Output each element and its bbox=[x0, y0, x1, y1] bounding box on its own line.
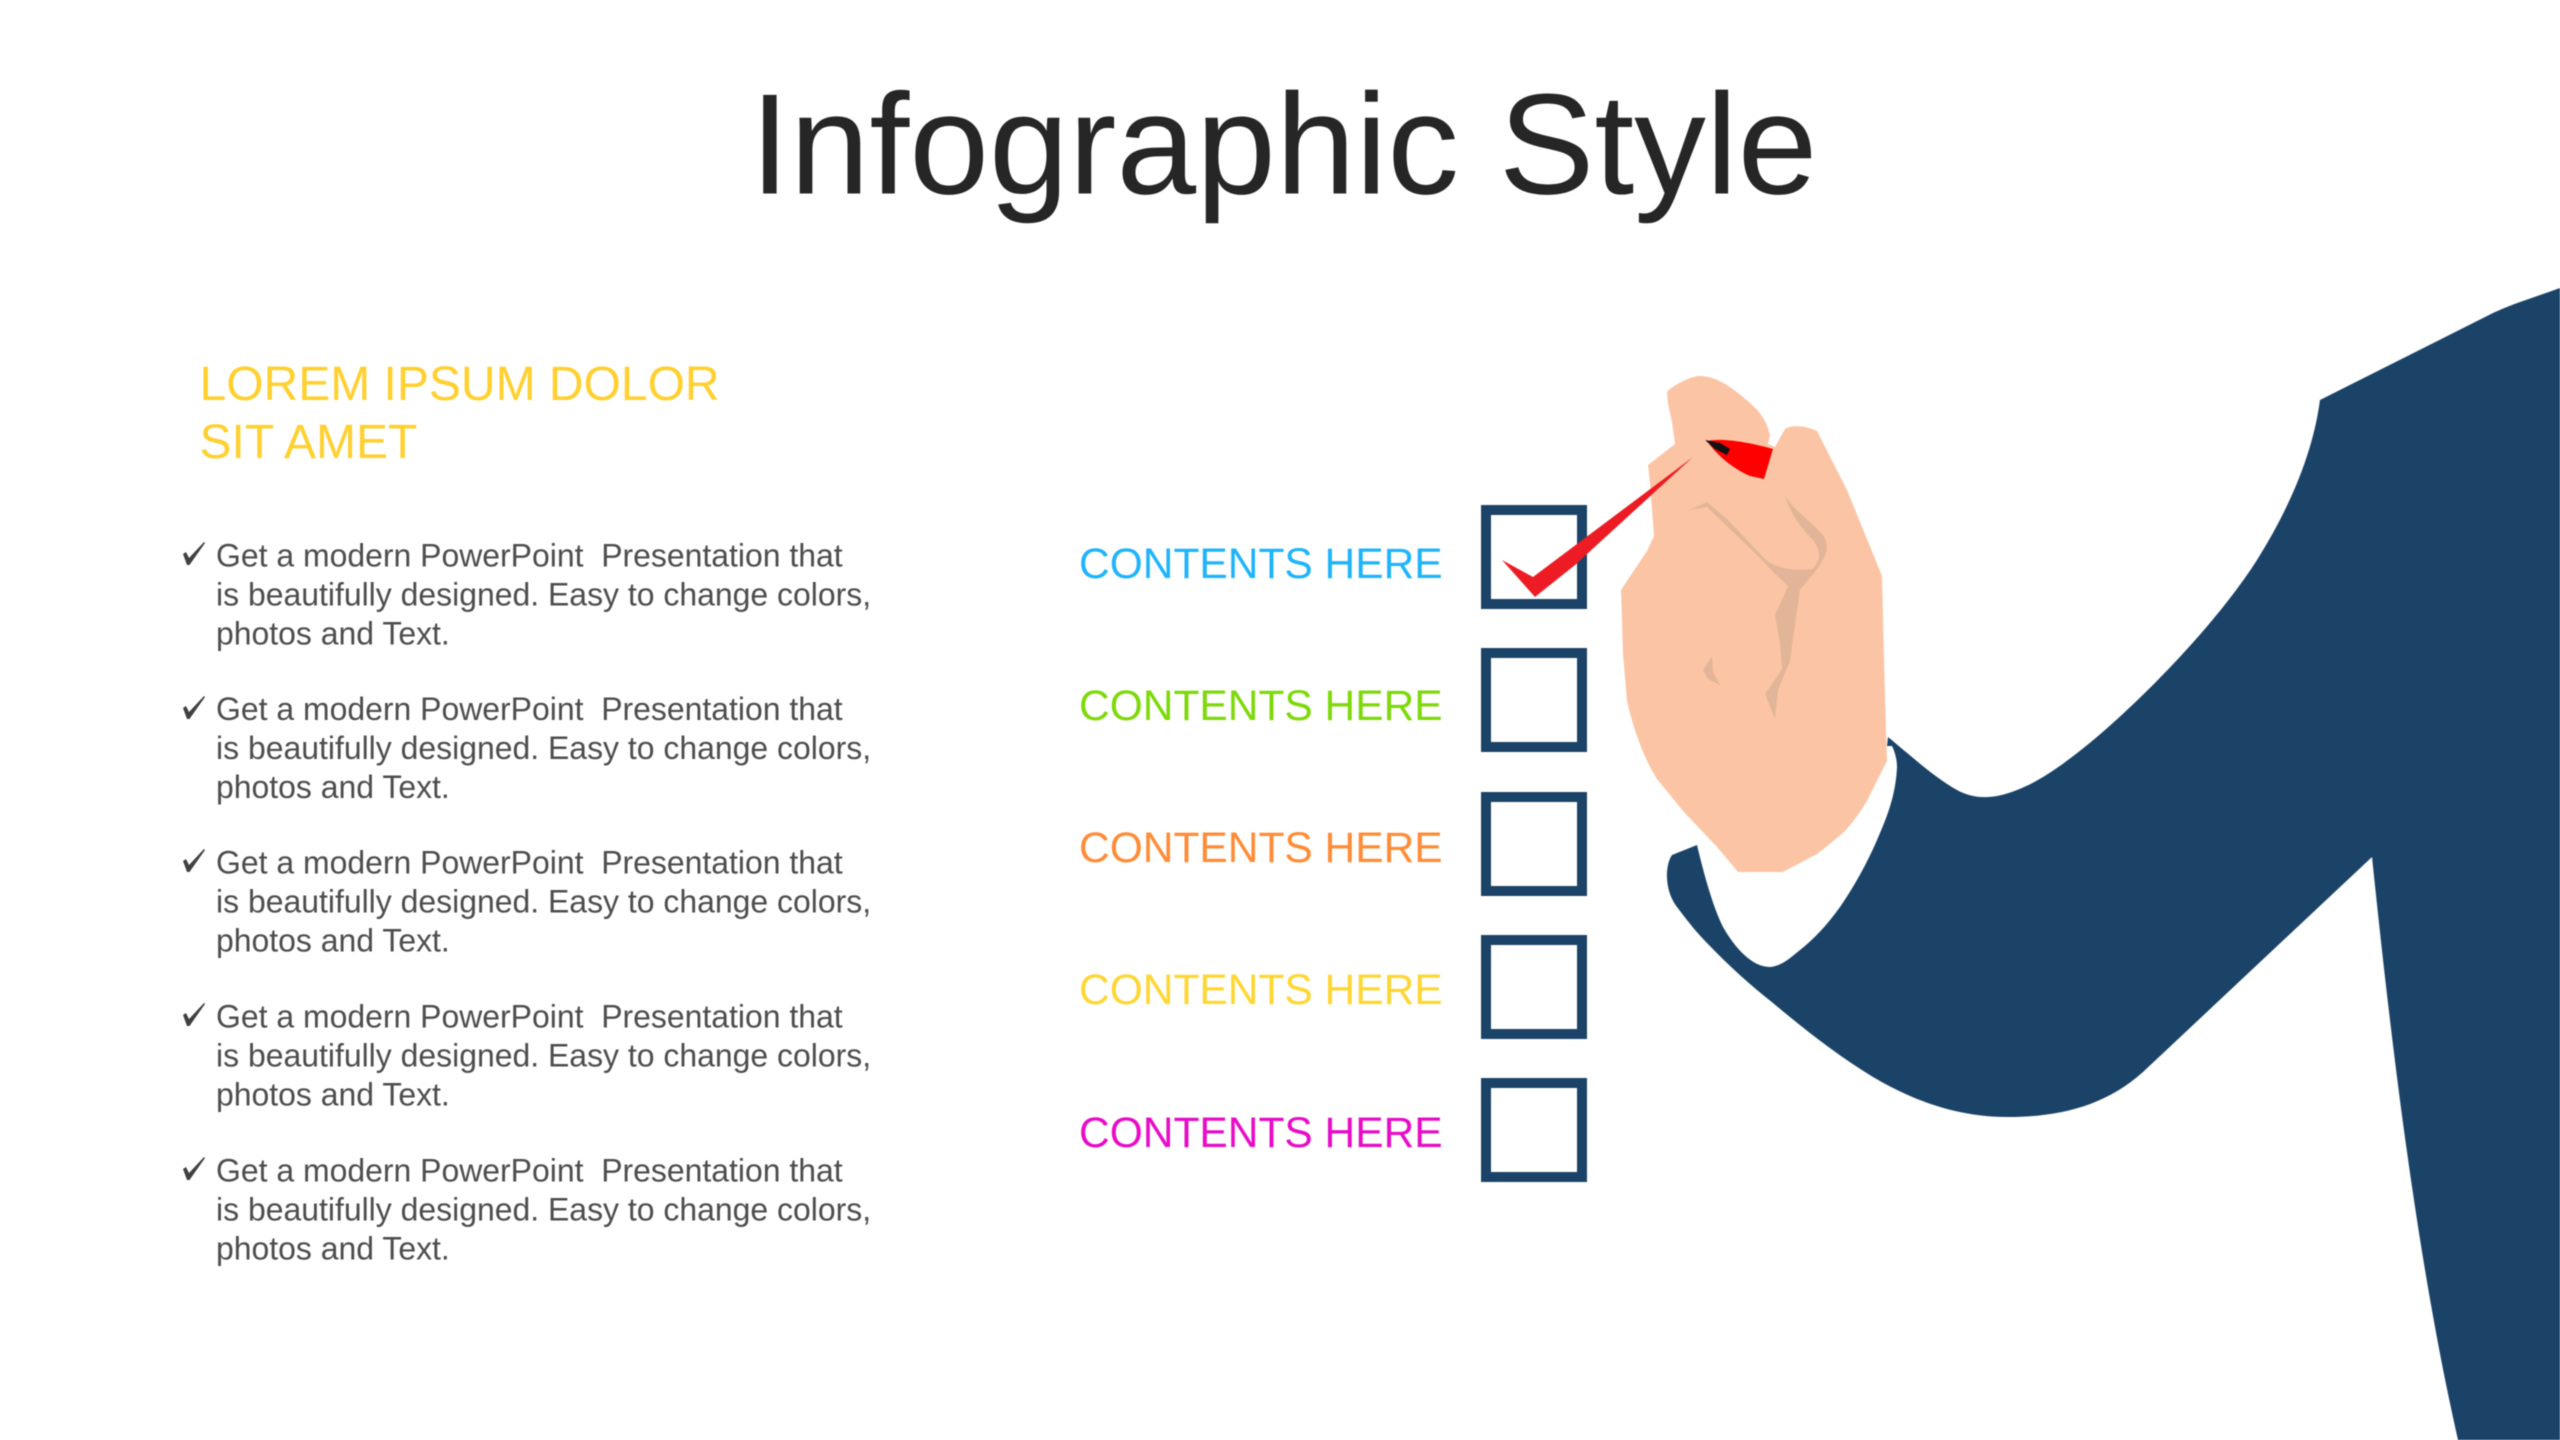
bullet item 5: is beautifully designed. Easy to change colors, bbox=[216, 1192, 871, 1228]
bullet item 2: is beautifully designed. Easy to change colors, bbox=[216, 730, 871, 766]
bullet item 3: Get a modern PowerPoint Presentation that bbox=[216, 844, 843, 880]
bullet item 4: Get a modern PowerPoint Presentation that bbox=[216, 998, 843, 1034]
bullet item 5: Get a modern PowerPoint Presentation that bbox=[216, 1152, 843, 1188]
bullet item 4: is beautifully designed. Easy to change colors, bbox=[216, 1038, 871, 1074]
red tick mark bbox=[1502, 457, 1693, 597]
checklist labels: CONTENTS HERE bbox=[1079, 1110, 1443, 1157]
bullet list bbox=[183, 538, 871, 1266]
bullet item 1: is beautifully designed. Easy to change colors, bbox=[216, 576, 871, 612]
bullet item 2: Get a modern PowerPoint Presentation that bbox=[216, 691, 843, 727]
checkboxes bbox=[1486, 510, 1582, 1177]
suit sleeve bbox=[1667, 288, 2560, 1440]
bullet item 5: photos and Text. bbox=[216, 1230, 450, 1266]
checklist labels: CONTENTS HERE bbox=[1079, 967, 1443, 1014]
bullet item 5 bbox=[183, 1152, 871, 1266]
bullet item 4 bbox=[183, 998, 871, 1112]
bullet item 4: photos and Text. bbox=[216, 1076, 450, 1112]
hand shape bbox=[1621, 376, 1887, 872]
pen bbox=[1705, 440, 1773, 479]
title: Infographic Style bbox=[750, 64, 1817, 224]
hand bbox=[1621, 376, 1887, 872]
heading bbox=[200, 358, 720, 469]
hand creases bbox=[1685, 495, 1827, 719]
checklist labels: CONTENTS HERE bbox=[1079, 683, 1443, 730]
checklist labels: CONTENTS HERE bbox=[1079, 825, 1443, 872]
bullet item 3: is beautifully designed. Easy to change colors, bbox=[216, 884, 871, 920]
heading: LOREM IPSUM DOLOR bbox=[200, 358, 720, 411]
bullet item 2: photos and Text. bbox=[216, 769, 450, 805]
checklist labels: CONTENTS HERE bbox=[1079, 541, 1443, 588]
bullet item 1 bbox=[183, 538, 871, 652]
bullet item 3 bbox=[183, 844, 871, 958]
bullet item 1: Get a modern PowerPoint Presentation that bbox=[216, 538, 843, 574]
bullet item 3: photos and Text. bbox=[216, 922, 450, 958]
heading: SIT AMET bbox=[200, 416, 417, 469]
checklist labels bbox=[1079, 541, 1443, 1157]
bullet item 1: photos and Text. bbox=[216, 616, 450, 652]
bullet item 2 bbox=[183, 691, 871, 805]
